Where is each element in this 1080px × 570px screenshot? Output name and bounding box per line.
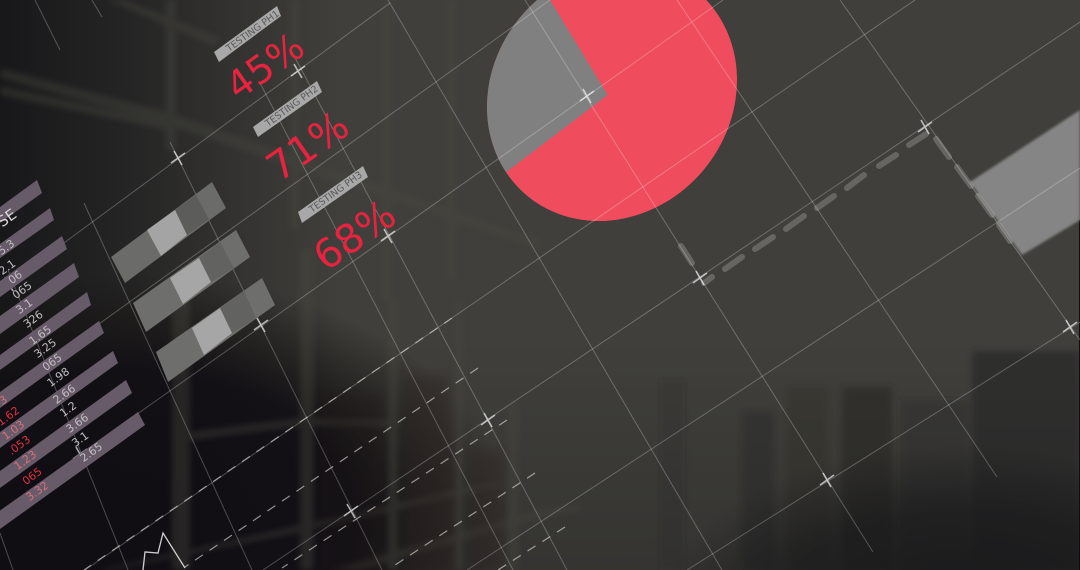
testing phase 2 label: TESTING PH2 — [262, 84, 321, 130]
testing phase 2 value: 71% — [258, 103, 358, 191]
testing phase 2 label — [253, 81, 322, 137]
table values column: 3.66 — [64, 411, 91, 436]
table values column: 326 — [21, 308, 46, 331]
table red values column: 065 — [20, 465, 45, 488]
pie chart — [486, 0, 738, 221]
testing phase 1 label — [214, 6, 282, 62]
testing phase 3 label: TESTING PH3 — [306, 170, 365, 216]
table values column: 065 — [10, 279, 35, 302]
data table — [0, 180, 145, 529]
table values column: 1.2 — [57, 399, 79, 420]
gray band at right edge — [970, 110, 1080, 255]
table red values column: 3.32 — [24, 479, 51, 504]
dashed trend lines — [84, 318, 565, 570]
testing phase 3 label — [298, 166, 368, 223]
pie slice: red — [435, 0, 789, 272]
table row bars — [0, 180, 145, 529]
testing phase 3 value: 68% — [305, 192, 405, 280]
stripe 3 — [156, 278, 275, 382]
table values column: 2.65 — [78, 440, 105, 465]
table values column: 06 — [6, 268, 25, 287]
stripe 2 — [133, 230, 250, 332]
testing phase 1 label: TESTING PH1 — [223, 9, 282, 55]
table values column — [0, 237, 105, 465]
table red values column: 1.23 — [12, 448, 39, 473]
pie slice: gray — [487, 0, 608, 172]
table values column: 065 — [40, 351, 65, 374]
table red values column: 1.03 — [0, 418, 27, 443]
grid cross markers — [2, 64, 1077, 518]
table values column: 3.1 — [69, 429, 91, 450]
table values column: 2.66 — [51, 382, 78, 407]
table red values column — [0, 393, 51, 504]
stripe 1 — [111, 182, 226, 283]
line chart fragment — [143, 533, 185, 570]
table values column: 3.25 — [32, 336, 59, 361]
testing phase 1 value: 45% — [218, 24, 312, 108]
table values column: 3.1 — [13, 296, 35, 317]
test phase progress stripes — [111, 182, 275, 382]
table red values column: .053 — [6, 433, 33, 458]
table values column: 1.65 — [27, 323, 54, 348]
table values column: 1.98 — [45, 365, 72, 390]
dashed rounded bracket — [681, 134, 1010, 283]
